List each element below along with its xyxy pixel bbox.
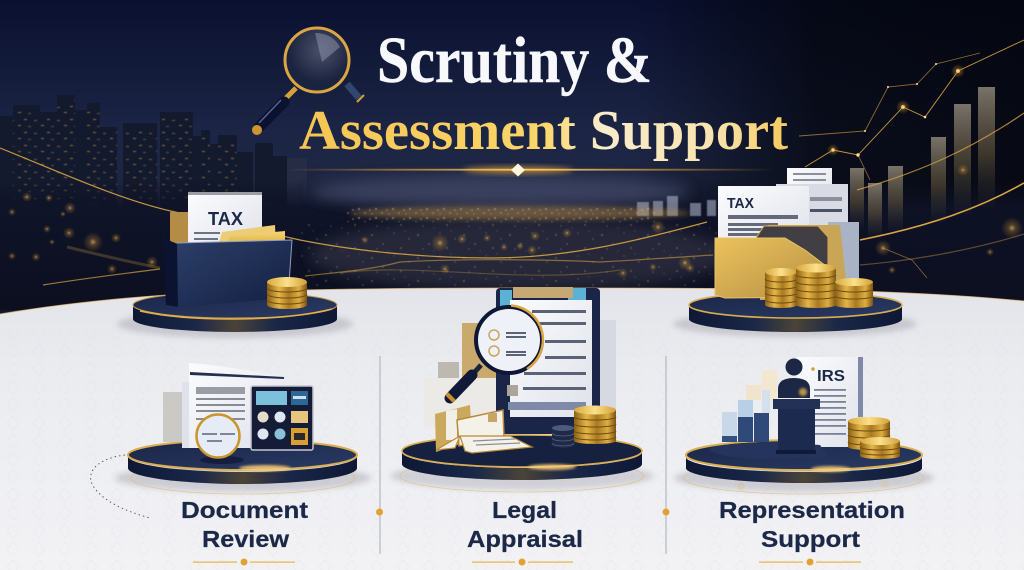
back documents	[776, 168, 859, 280]
calculator	[251, 386, 313, 450]
three coin stacks	[765, 264, 873, 308]
tax document	[718, 186, 809, 248]
platform	[133, 292, 337, 332]
panel: document review	[91, 363, 371, 566]
gold folder	[715, 225, 846, 300]
accent rule	[472, 558, 573, 566]
bar chart backdrop right	[850, 87, 995, 238]
panel: top-right tax folder	[673, 168, 917, 337]
label: document review	[181, 497, 308, 552]
golden bokeh lights	[8, 164, 1023, 278]
dark coin stack	[552, 425, 574, 448]
title rule with diamond	[285, 164, 775, 176]
label: representation support: Representation	[719, 497, 905, 523]
panel: legal appraisal	[390, 287, 654, 566]
stack of documents	[163, 363, 284, 448]
tax document: TAX	[727, 195, 754, 212]
floor ring	[684, 462, 924, 494]
label: document review: Document	[181, 497, 308, 523]
background sheets	[424, 320, 616, 433]
label: legal appraisal	[467, 497, 583, 552]
night sky background	[0, 0, 1024, 330]
platform gold glint	[140, 309, 332, 319]
navy folder	[162, 223, 292, 307]
label: legal appraisal: Appraisal	[467, 526, 583, 552]
platform glint	[239, 465, 291, 471]
label: document review: Review	[202, 526, 289, 552]
gold folders	[218, 225, 285, 247]
floor edge highlight	[0, 288, 1024, 314]
IRS document: IRS	[817, 368, 845, 385]
lower dark city band	[0, 180, 1024, 310]
distant city lights	[300, 206, 730, 290]
title: Scrutiny &	[377, 24, 652, 97]
label: representation support	[719, 497, 905, 552]
magnifier lens	[196, 414, 244, 464]
pale building cluster	[637, 196, 716, 216]
panel: representation support	[674, 357, 934, 566]
floor ring	[400, 460, 644, 492]
coin stacks	[848, 417, 900, 459]
platform	[128, 440, 357, 484]
white stage floor	[0, 288, 1024, 570]
gold coin stack	[574, 406, 616, 444]
dark right-hand sky	[0, 0, 1024, 300]
hazy blue horizon	[310, 176, 690, 208]
floor texture	[0, 330, 1024, 570]
bar blocks	[722, 370, 777, 442]
title magnifying glass icon	[252, 28, 364, 135]
label: legal appraisal: Legal	[492, 497, 557, 523]
platform glints	[736, 466, 890, 491]
skyline windows	[13, 100, 237, 203]
title: Assessment Support	[299, 100, 788, 162]
magnifying glass	[449, 306, 543, 399]
platform glint	[528, 464, 576, 470]
section dividers	[376, 356, 670, 554]
sweeping gold light curves	[0, 113, 1024, 285]
city skyline left	[0, 95, 321, 208]
clipboard	[496, 287, 600, 434]
rising trend lines	[799, 40, 1024, 278]
accent rule	[193, 558, 295, 566]
platform	[689, 292, 902, 332]
platform	[402, 435, 642, 480]
tax document	[170, 192, 262, 250]
floor ring	[131, 462, 355, 494]
coin stack	[267, 277, 307, 309]
dotted arc	[91, 455, 150, 518]
platform	[686, 440, 922, 483]
open book and folders	[435, 405, 532, 453]
label: representation support: Support	[761, 526, 860, 552]
title	[299, 24, 788, 162]
tax document: TAX	[208, 209, 243, 229]
accent rule	[759, 558, 861, 566]
panel: top-left tax folder	[117, 192, 353, 338]
person at podium	[709, 358, 828, 459]
warm haze over lower city	[310, 219, 730, 291]
IRS document	[797, 357, 863, 447]
